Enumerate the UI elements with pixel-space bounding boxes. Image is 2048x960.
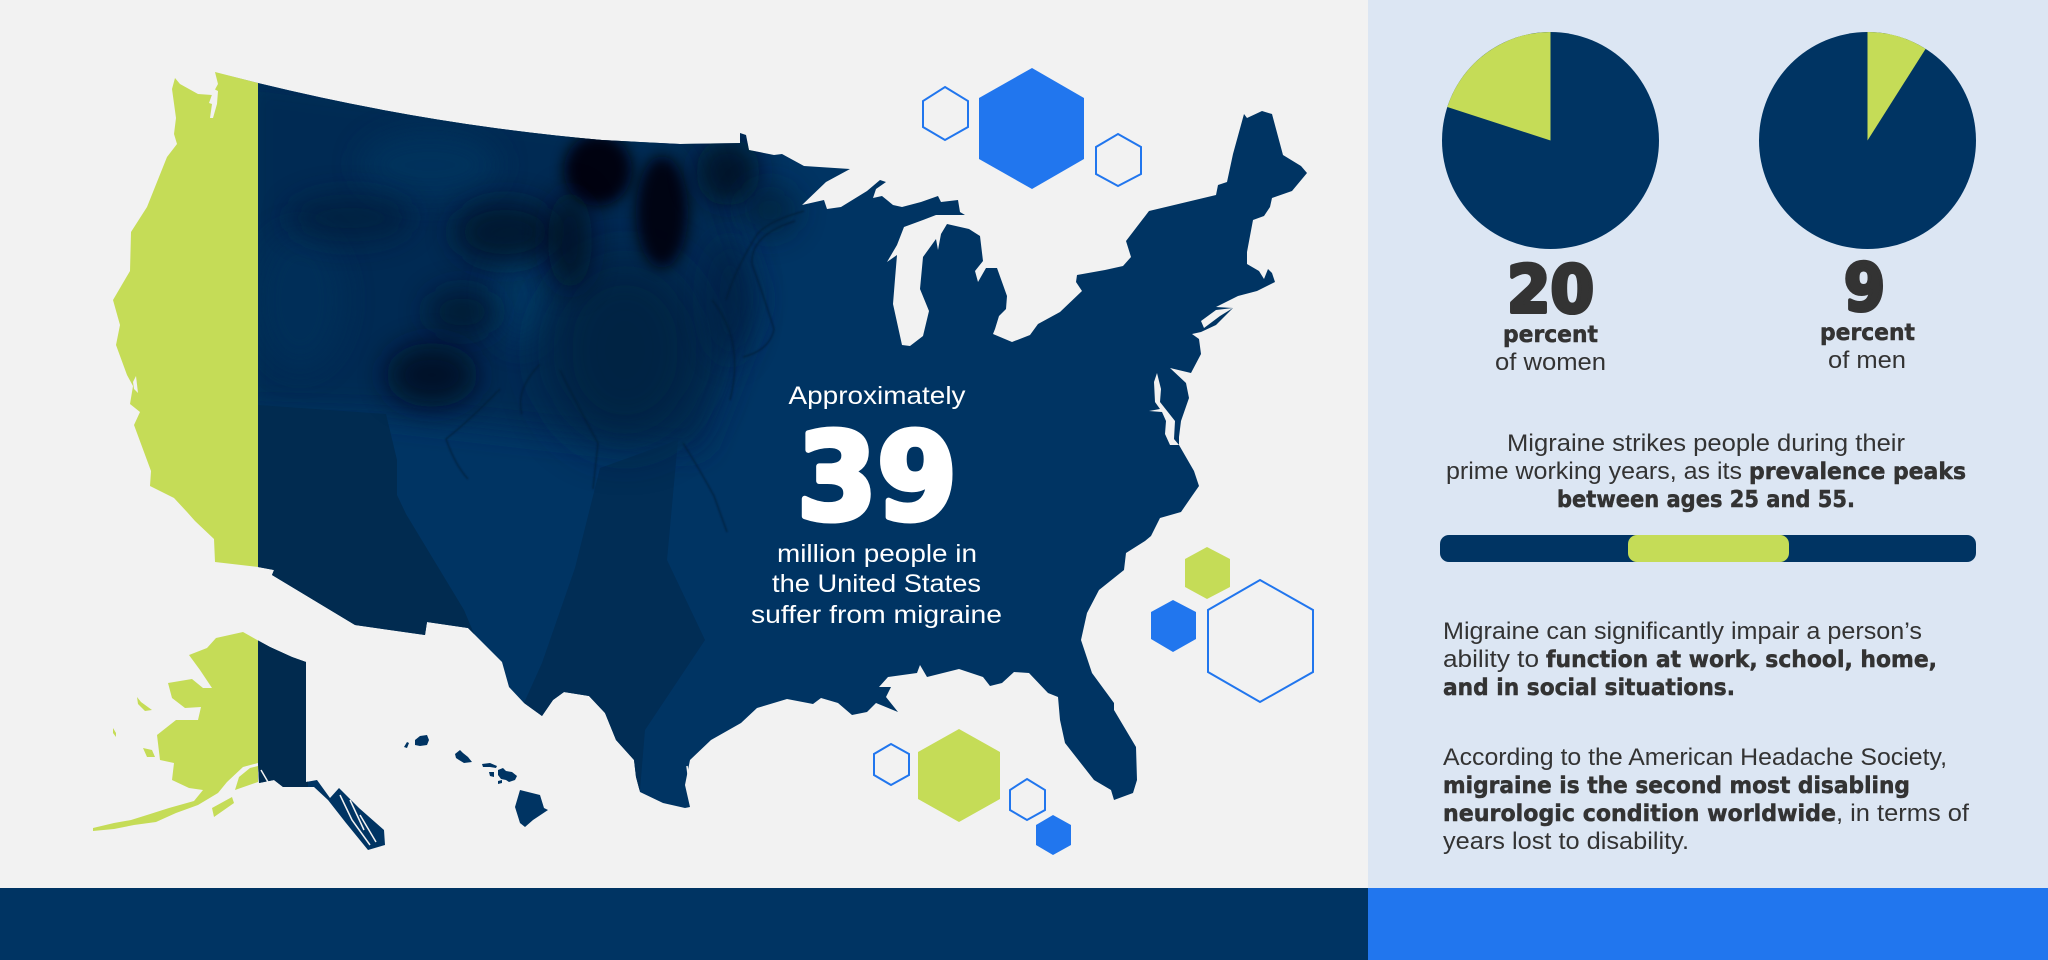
text block: American Headache Society: years lost to disability. <box>1443 828 1689 855</box>
callout: 39 million people: million people in <box>777 540 977 568</box>
text block: prime working years: prevalence peaks <box>1749 459 1966 485</box>
stat label: men: of men <box>1828 347 1906 374</box>
text block: prime working years: between ages 25 and 55. <box>1557 487 1855 513</box>
pie chart: women 20 percent <box>1442 32 1659 249</box>
water: Puget Sound <box>209 89 218 118</box>
stat label: women: 20 <box>1507 253 1594 328</box>
text block: American Headache Society: neurologic condition worldwide <box>1443 801 1836 827</box>
text block: impairment <box>1443 618 1937 701</box>
callout: 39 million people: 39 <box>797 409 957 548</box>
panel: statistics sidebar <box>1368 0 2048 888</box>
text block: impairment: ability to <box>1443 646 1539 673</box>
text block: American Headache Society <box>1443 744 1969 855</box>
hexagon cluster: top <box>923 68 1141 189</box>
text block: American Headache Society: , in terms of <box>1836 800 1969 827</box>
west lime band <box>93 72 258 831</box>
face shading <box>240 70 804 800</box>
callout: 39 million people: suffer from migraine <box>751 601 1002 629</box>
footer bar: blue <box>1368 888 2048 960</box>
text block: prime working years: Migraine strikes people during their <box>1507 430 1905 457</box>
water: Padre Island sliver <box>687 766 692 800</box>
text block: prime working years <box>1446 430 1966 513</box>
age range bar <box>1440 535 1976 562</box>
stat label: women <box>1495 253 1606 376</box>
callout: 39 million people <box>751 382 1002 629</box>
water: Alaska panhandle channels <box>261 770 376 845</box>
pie chart: men 9 percent <box>1759 32 1976 249</box>
stat label: men: 9 <box>1844 251 1885 326</box>
stat label: women: of women <box>1495 349 1606 376</box>
callout: 39 million people: the United States <box>772 570 981 598</box>
panel: map background <box>0 0 1368 888</box>
stat label: men <box>1820 251 1915 374</box>
water: San Francisco Bay <box>133 376 138 393</box>
hexagon cluster: right <box>1151 547 1313 702</box>
text block: impairment: and in social situations. <box>1443 675 1735 701</box>
hexagon cluster: bottom <box>874 729 1071 855</box>
text block: American Headache Society: migraine is the second most disabling <box>1443 773 1910 799</box>
footer bar: navy <box>0 888 1368 960</box>
text block: prime working years: prime working years, as its <box>1446 458 1742 485</box>
water: Long Island Sound <box>1201 308 1233 328</box>
map: United States with face photo overlay <box>93 72 1307 850</box>
text block: American Headache Society: According to the American Headache Society, <box>1443 744 1947 771</box>
text block: impairment: function at work, school, home, <box>1546 647 1937 673</box>
water: Chesapeake Bay <box>1149 373 1179 445</box>
stat label: women: percent <box>1503 322 1598 348</box>
callout: 39 million people: Approximately <box>788 382 966 410</box>
stat label: men: percent <box>1820 320 1915 346</box>
text block: impairment: Migraine can significantly impair a person’s <box>1443 618 1922 645</box>
